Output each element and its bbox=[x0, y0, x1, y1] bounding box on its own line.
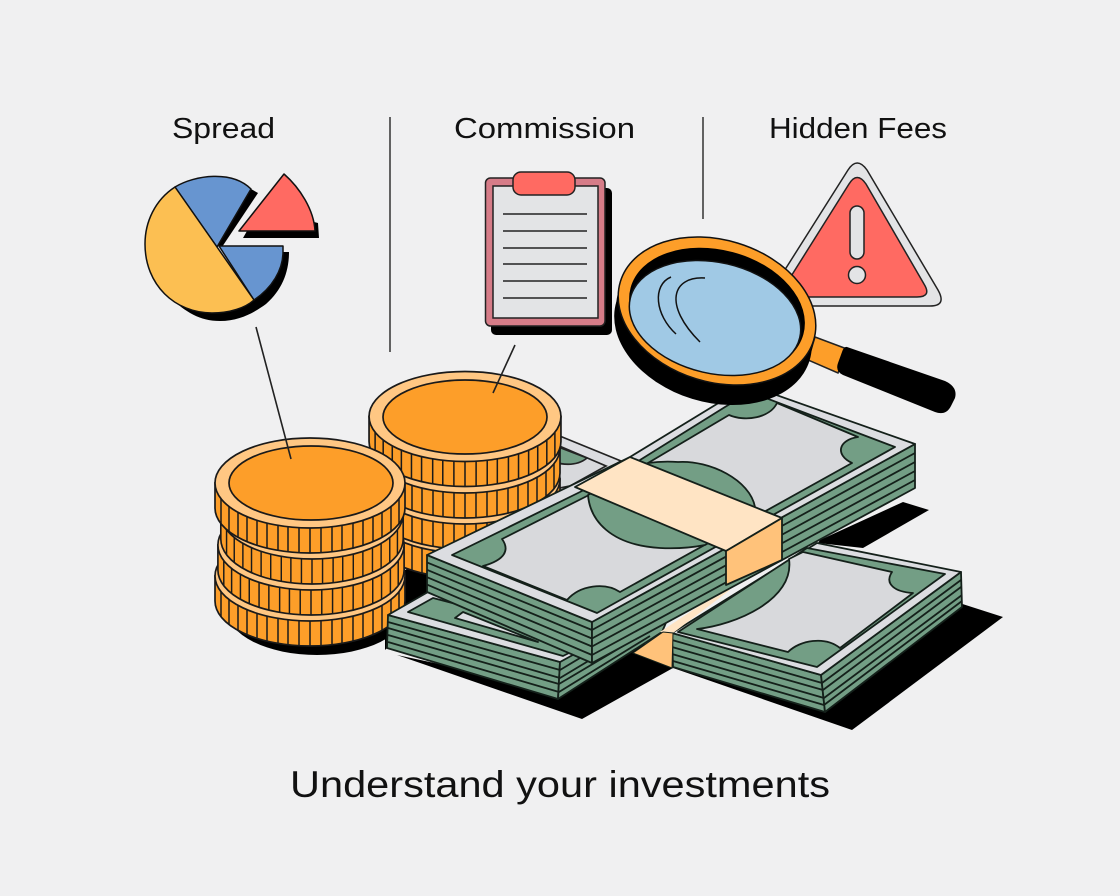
caption: Understand your investments: Understand your investments bbox=[290, 764, 830, 805]
icon: warning triangle bbox=[762, 163, 941, 306]
pointer: spread to coins bbox=[256, 327, 291, 459]
cash bundle: lower left bbox=[387, 590, 680, 699]
paper band: under bundle bbox=[633, 590, 730, 668]
pointer: commission to coins bbox=[493, 345, 515, 393]
divider left bbox=[389, 117, 391, 352]
note peeking behind coins bbox=[545, 430, 621, 500]
icon: magnifying glass bbox=[596, 214, 956, 428]
coin stack: back bbox=[369, 372, 561, 578]
icon: clipboard bbox=[486, 172, 612, 335]
shadow: bundles bbox=[227, 502, 1003, 730]
heading: Hidden Fees: Hidden Fees bbox=[769, 113, 947, 145]
coin stack: front bbox=[215, 438, 405, 646]
heading: Spread: Spread bbox=[172, 113, 275, 145]
cash bundle: lower right bbox=[672, 543, 962, 712]
heading: Commission: Commission bbox=[454, 113, 635, 145]
paper band: top bbox=[575, 457, 782, 585]
divider right bbox=[702, 117, 704, 219]
icon: pie chart bbox=[145, 174, 319, 321]
cash bundle: top bbox=[427, 385, 915, 663]
